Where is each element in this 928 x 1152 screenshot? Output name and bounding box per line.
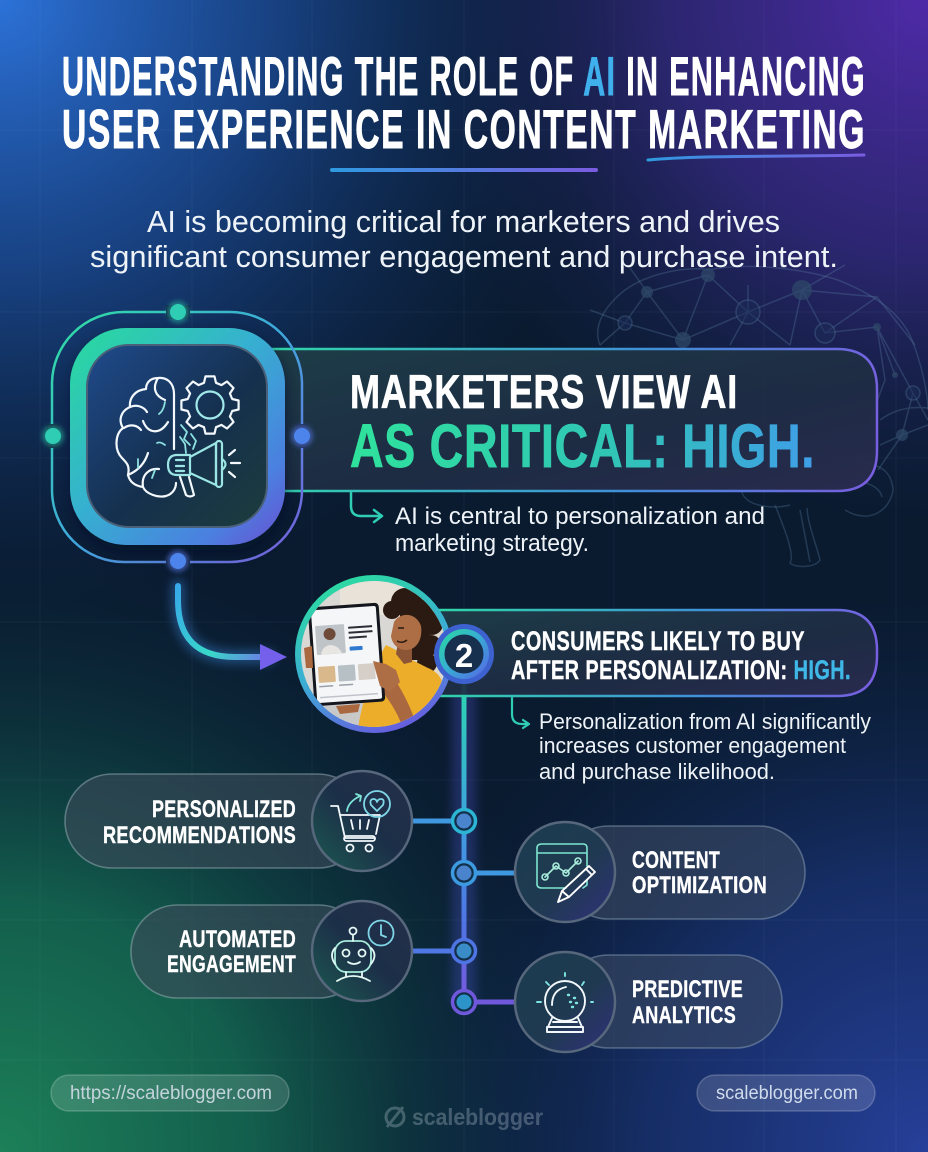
footer pill: right domain: scaleblogger.com xyxy=(716,1083,858,1104)
panel: consumers likely to buy: AFTER PERSONALIZATION: HIGH. xyxy=(511,655,851,685)
note: AI is central xyxy=(395,503,765,557)
number badge 2 xyxy=(434,624,494,684)
subtitle xyxy=(90,204,838,274)
item: personalized recommendations: RECOMMENDATIONS xyxy=(103,822,296,849)
footer pill: left url xyxy=(51,1075,289,1111)
footer logo: scaleblogger xyxy=(412,1104,543,1130)
photo: woman holding tablet xyxy=(295,575,457,740)
heading: marketers view AI: MARKETERS VIEW AI xyxy=(350,365,738,418)
megaphone xyxy=(168,441,226,487)
icon: cart with heart xyxy=(331,791,390,852)
footer pill: right domain xyxy=(697,1075,875,1111)
item: automated engagement xyxy=(131,901,412,1001)
tablet xyxy=(308,603,385,706)
footer pill: left url: https://scaleblogger.com xyxy=(70,1083,272,1104)
panel: consumers likely to buy: CONSUMERS LIKELY TO BUY xyxy=(511,626,805,656)
item: content optimization: CONTENT xyxy=(632,847,720,874)
icon: robot with clock xyxy=(332,920,394,981)
arrow: elbow to personalization note xyxy=(512,698,529,728)
subtitle: AI is becoming critical for marketers and drives xyxy=(147,204,780,239)
branch connectors xyxy=(410,821,518,1002)
note: personalization from AI: and purchase likelihood. xyxy=(539,759,775,784)
neck xyxy=(396,647,412,664)
item: automated engagement: AUTOMATED xyxy=(179,926,296,953)
eye and smile details xyxy=(397,628,407,642)
face xyxy=(391,615,421,650)
subtitle: significant consumer engagement and purchase intent. xyxy=(90,239,838,274)
curved arrow to panel 2 xyxy=(178,586,287,670)
left hand on tablet xyxy=(304,646,313,668)
gear xyxy=(181,376,239,434)
connector nodes on icon frame xyxy=(42,301,313,572)
brain network watermark xyxy=(590,265,928,566)
pointing hand xyxy=(373,661,400,692)
item: content optimization: OPTIMIZATION xyxy=(632,872,767,899)
lower arm xyxy=(336,704,360,714)
title divider xyxy=(330,168,598,172)
item: content optimization xyxy=(515,822,805,922)
note: personalization from AI xyxy=(539,709,871,784)
panel: marketers view AI xyxy=(230,349,877,491)
title accent: wavy underline xyxy=(648,155,864,160)
hair xyxy=(383,588,443,673)
arrow: elbow to AI note xyxy=(351,493,382,522)
megaphone handle and sound lines xyxy=(180,450,240,496)
vertical timeline spine xyxy=(452,684,476,1002)
item: automated engagement: ENGAGEMENT xyxy=(167,951,296,978)
timeline nodes xyxy=(452,810,476,1014)
title xyxy=(62,45,866,160)
icon frame: brain, gear and megaphone xyxy=(52,312,302,562)
item: predictive analytics xyxy=(515,952,782,1052)
item: personalized recommendations xyxy=(65,771,412,871)
panel: consumers likely to buy xyxy=(400,610,877,696)
number badge 2: 2 xyxy=(455,637,473,674)
icon: crystal ball xyxy=(537,973,593,1032)
shirt xyxy=(358,645,442,727)
neural sparks xyxy=(138,402,196,478)
brain outline xyxy=(116,378,176,497)
forearm xyxy=(384,684,413,722)
item: predictive analytics: ANALYTICS xyxy=(632,1002,736,1029)
note: AI is central: marketing strategy. xyxy=(395,530,589,557)
item: predictive analytics: PREDICTIVE xyxy=(632,976,743,1003)
note: personalization from AI: increases customer engagement xyxy=(539,733,846,758)
note: AI is central: AI is central to personalization and xyxy=(395,503,765,530)
icon: chart window and pencil xyxy=(537,844,595,902)
note: personalization from AI: Personalization from AI significantly xyxy=(539,709,871,734)
item: personalized recommendations: PERSONALIZED xyxy=(152,796,296,823)
